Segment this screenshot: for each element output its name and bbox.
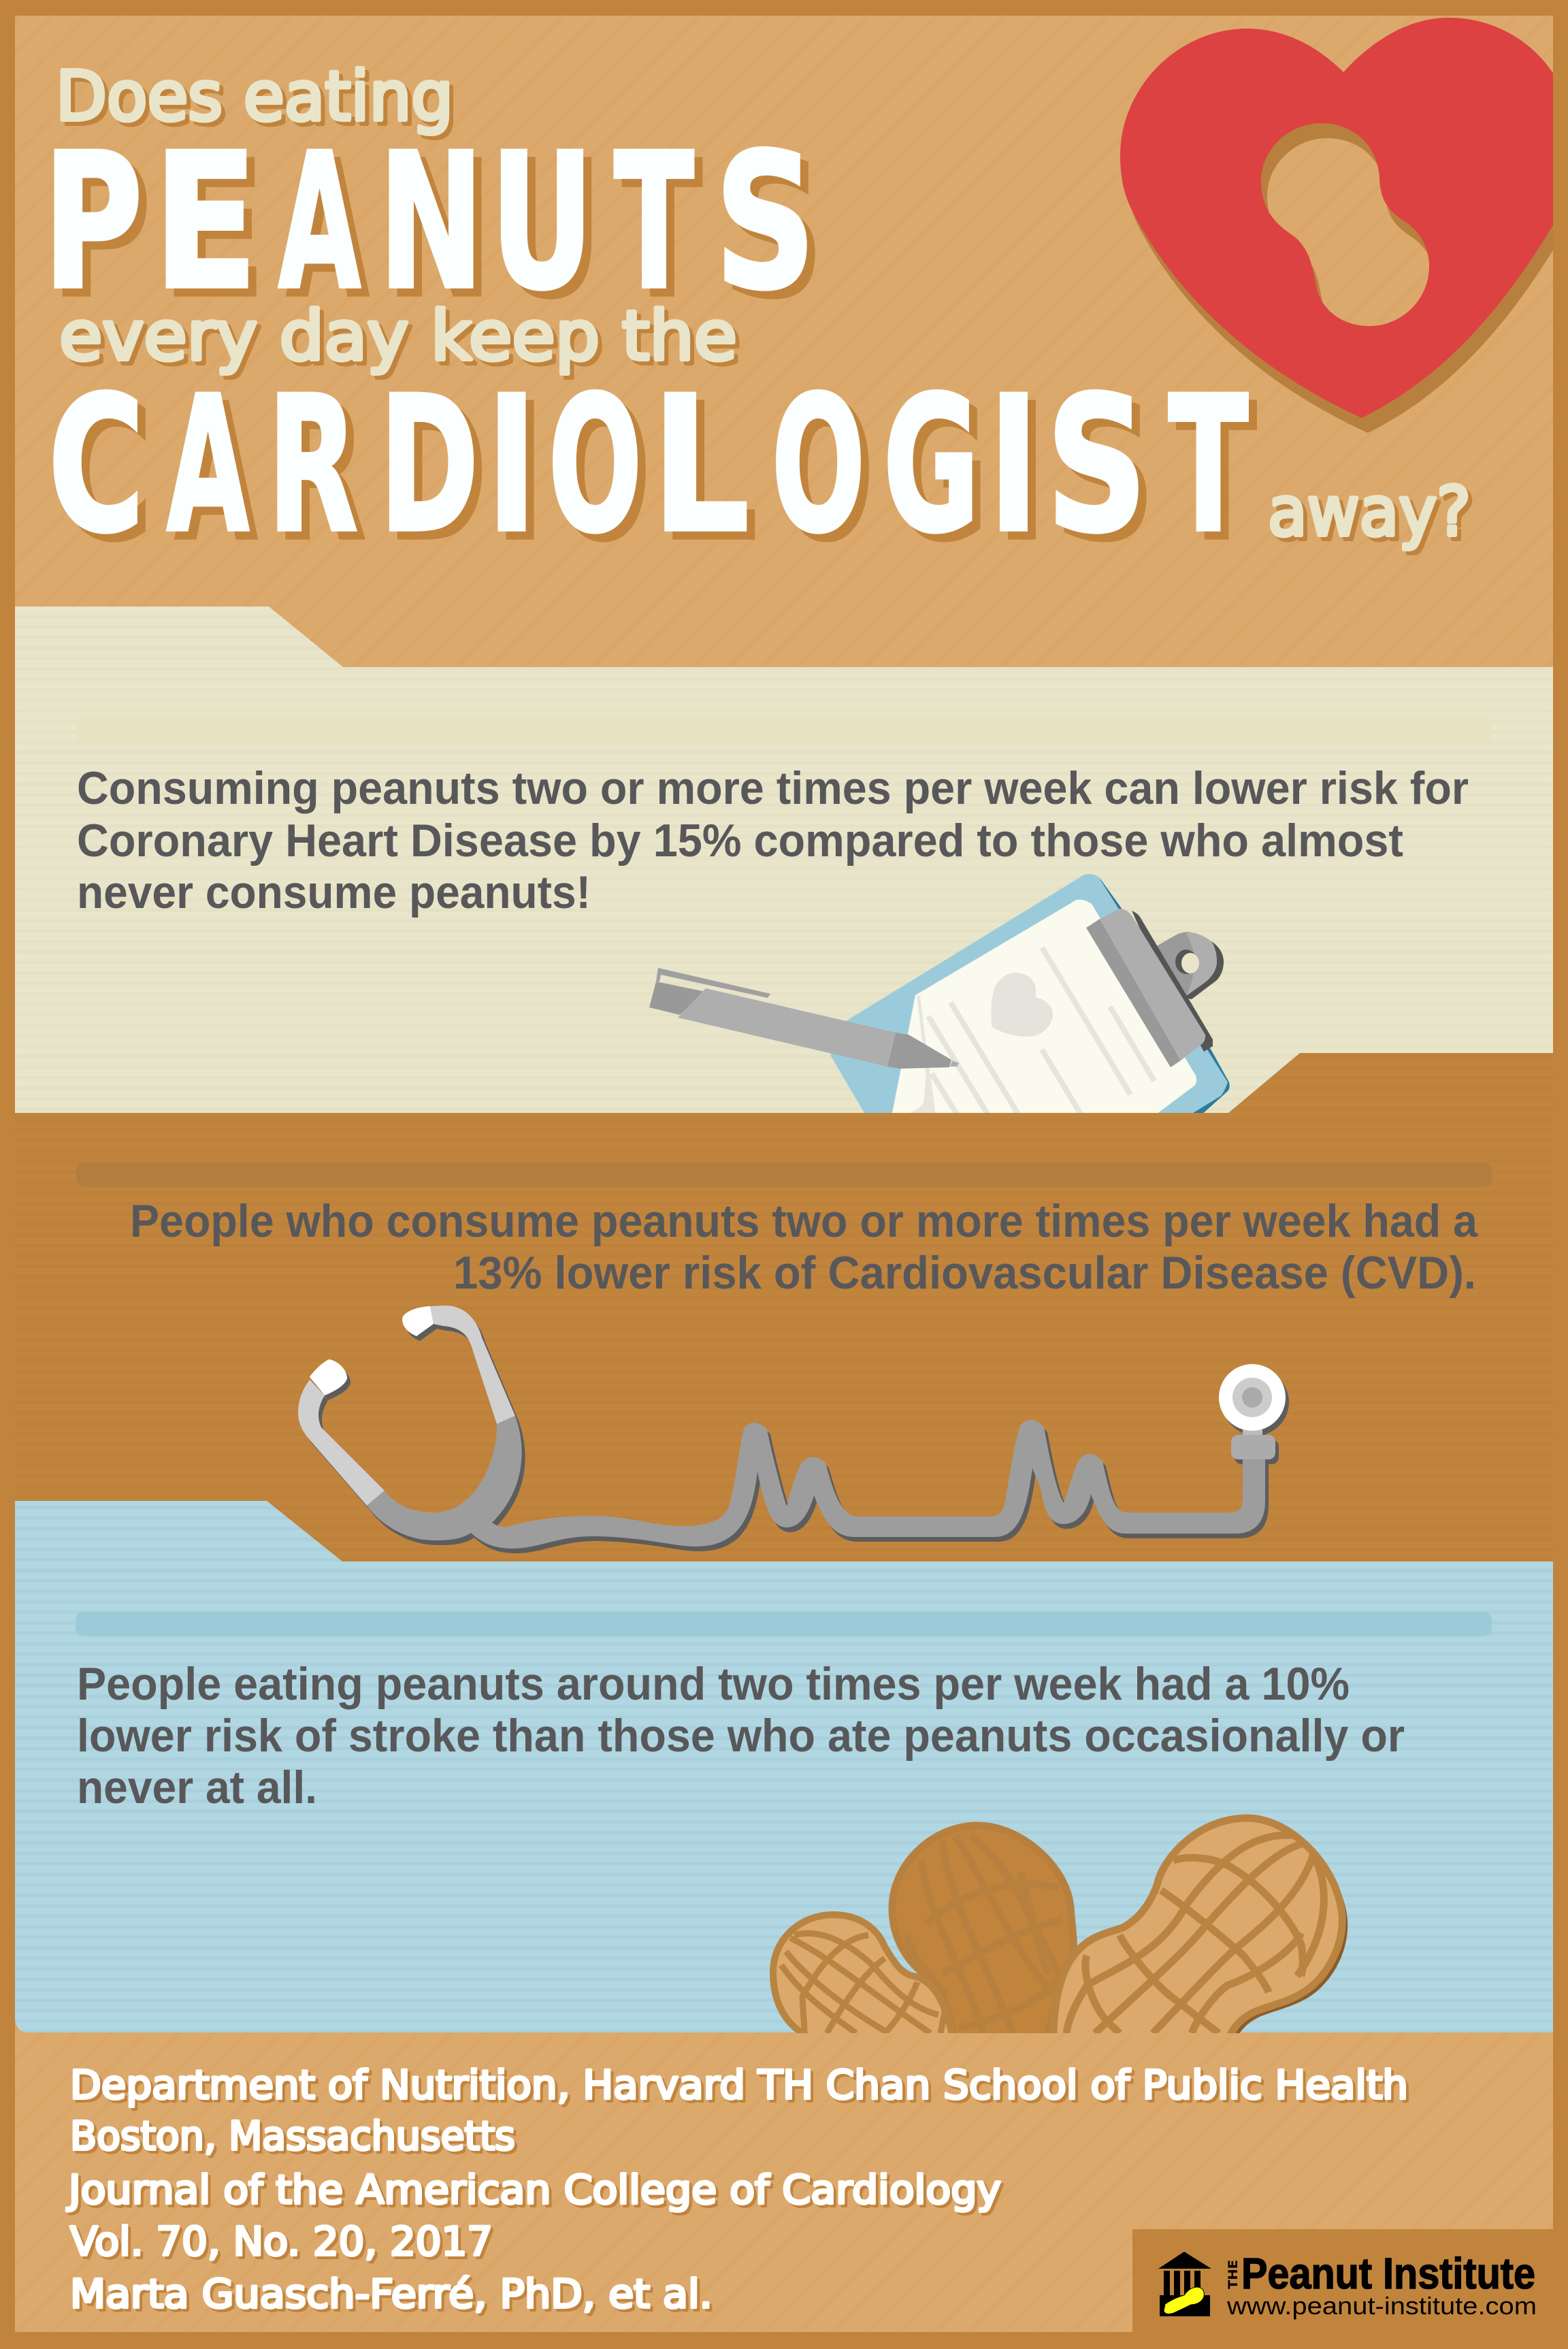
text: cardiovascular disease finding: 13% lower risk of Cardiovascular Disease (CVD). xyxy=(453,1247,1476,1299)
pen clip wire xyxy=(656,968,770,998)
chest piece neck xyxy=(1243,1428,1262,1436)
title: PEANUTS: S xyxy=(715,114,816,331)
title: PEANUTS: P xyxy=(43,113,143,331)
text: website: www.peanut-institute.com xyxy=(1226,2292,1537,2320)
blue board xyxy=(830,874,1228,1116)
title: PEANUTS: A xyxy=(278,114,361,331)
text: stroke finding: never at all. xyxy=(77,1762,317,1813)
title: CARDIOLOGIST: R xyxy=(267,357,358,574)
icon: peanuts xyxy=(773,1818,1348,2043)
text: citation xyxy=(67,2062,1408,2317)
board edge shadow xyxy=(1100,878,1230,1116)
panel: stroke xyxy=(15,1501,1553,2043)
text: citation: Journal of the American College of Cardiology xyxy=(67,2167,1001,2213)
highlight strip xyxy=(76,716,1492,743)
title: CARDIOLOGIST: I xyxy=(487,357,537,574)
text: stroke finding: lower risk of stroke than those who ate peanuts occasionally or xyxy=(77,1710,1405,1762)
icon: pen xyxy=(649,968,959,1069)
title: PEANUTS: N xyxy=(379,114,483,331)
chest piece xyxy=(1219,1364,1286,1431)
clip ring highlight xyxy=(1186,933,1217,996)
title: CARDIOLOGIST: S xyxy=(1046,357,1147,574)
title: away?: away? xyxy=(1268,472,1471,551)
title: CARDIOLOGIST: C xyxy=(48,357,144,574)
right light arm xyxy=(430,1306,515,1424)
clip hole xyxy=(1175,950,1197,974)
left light arm xyxy=(298,1380,385,1506)
text: stroke finding: People eating peanuts around two times per week had a 10% xyxy=(77,1658,1350,1710)
title: CARDIOLOGIST: D xyxy=(379,357,479,574)
small peanut xyxy=(773,1915,956,2041)
pen tip xyxy=(950,1060,959,1067)
left white tip xyxy=(310,1359,347,1395)
clip bar dark band xyxy=(1086,919,1181,1067)
icon: clipboard xyxy=(830,874,1230,1116)
title: Does eating: Does eating xyxy=(56,56,453,136)
paper fold xyxy=(910,996,935,1113)
title: PEANUTS: T xyxy=(614,114,694,331)
title: every day keep the: every day keep the xyxy=(59,296,737,376)
clip ring shadow xyxy=(1154,934,1224,999)
title: PEANUTS: U xyxy=(491,114,593,331)
blue folder background xyxy=(15,1501,1553,2032)
text: THE: THE xyxy=(1226,2260,1241,2289)
middle peanut xyxy=(892,1826,1077,2041)
big peanut xyxy=(1054,1818,1348,2043)
paper lines xyxy=(928,947,1154,1116)
title: CARDIOLOGIST: A xyxy=(167,357,249,574)
title: PEANUTS: E xyxy=(153,114,258,331)
heart on paper xyxy=(991,973,1053,1037)
title: CARDIOLOGIST: O xyxy=(549,357,642,574)
text: citation: Marta Guasch-Ferré, PhD, et al. xyxy=(70,2271,713,2317)
text: coronary heart disease finding: never consume peanuts! xyxy=(77,866,591,918)
clip shadow xyxy=(1132,911,1213,1052)
strip xyxy=(76,1612,1492,1636)
text: coronary heart disease finding: Consuming peanuts two or more times per week can lower risk for xyxy=(77,762,1469,814)
title: CARDIOLOGIST: O xyxy=(772,357,865,574)
logo: The Peanut Institute xyxy=(1132,2229,1568,2349)
paper xyxy=(892,899,1196,1116)
pen nose xyxy=(887,1033,951,1069)
cream folder background xyxy=(15,606,1553,1116)
chest piece ring xyxy=(1232,1378,1272,1417)
clip ring xyxy=(1154,932,1217,996)
clip bar xyxy=(1100,909,1205,1060)
text: citation: Department of Nutrition, Harvard TH Chan School of Public Health xyxy=(70,2062,1408,2108)
text: citation: Boston, Massachusetts xyxy=(70,2113,515,2159)
title: CARDIOLOGIST: I xyxy=(989,357,1039,574)
chest piece centre xyxy=(1242,1387,1262,1408)
text: citation: Vol. 70, No. 20, 2017 xyxy=(70,2218,493,2265)
panel: coronary heart disease xyxy=(15,606,1553,1116)
strip xyxy=(76,1163,1492,1187)
gray tube xyxy=(367,1416,1265,1549)
title: CARDIOLOGIST: T xyxy=(1169,357,1248,574)
brown folder background xyxy=(15,1053,1553,1572)
icon: building with peanut xyxy=(1158,2252,1211,2316)
pen barrel xyxy=(678,988,896,1067)
pen cap xyxy=(649,982,706,1015)
panel: cardiovascular disease xyxy=(15,1053,1553,1572)
text: cardiovascular disease finding: People who consume peanuts two or more times per week had a xyxy=(130,1195,1478,1247)
text: Peanut Institute: Peanut Institute xyxy=(1241,2249,1535,2298)
logo background xyxy=(1132,2229,1568,2349)
text: coronary heart disease finding: Coronary Heart Disease by 15% compared to those who almost xyxy=(77,815,1403,866)
title: CARDIOLOGIST: G xyxy=(883,357,980,574)
icon: stethoscope with heartbeat tube xyxy=(298,1306,1286,1549)
title: PEANUTS xyxy=(43,113,816,331)
chest piece connector xyxy=(1231,1435,1275,1459)
right white tip xyxy=(402,1306,434,1336)
title: CARDIOLOGIST: L xyxy=(652,357,749,574)
title: CARDIOLOGIST xyxy=(48,357,1248,574)
icon: red heart with peanut-shaped hole xyxy=(1120,18,1568,433)
